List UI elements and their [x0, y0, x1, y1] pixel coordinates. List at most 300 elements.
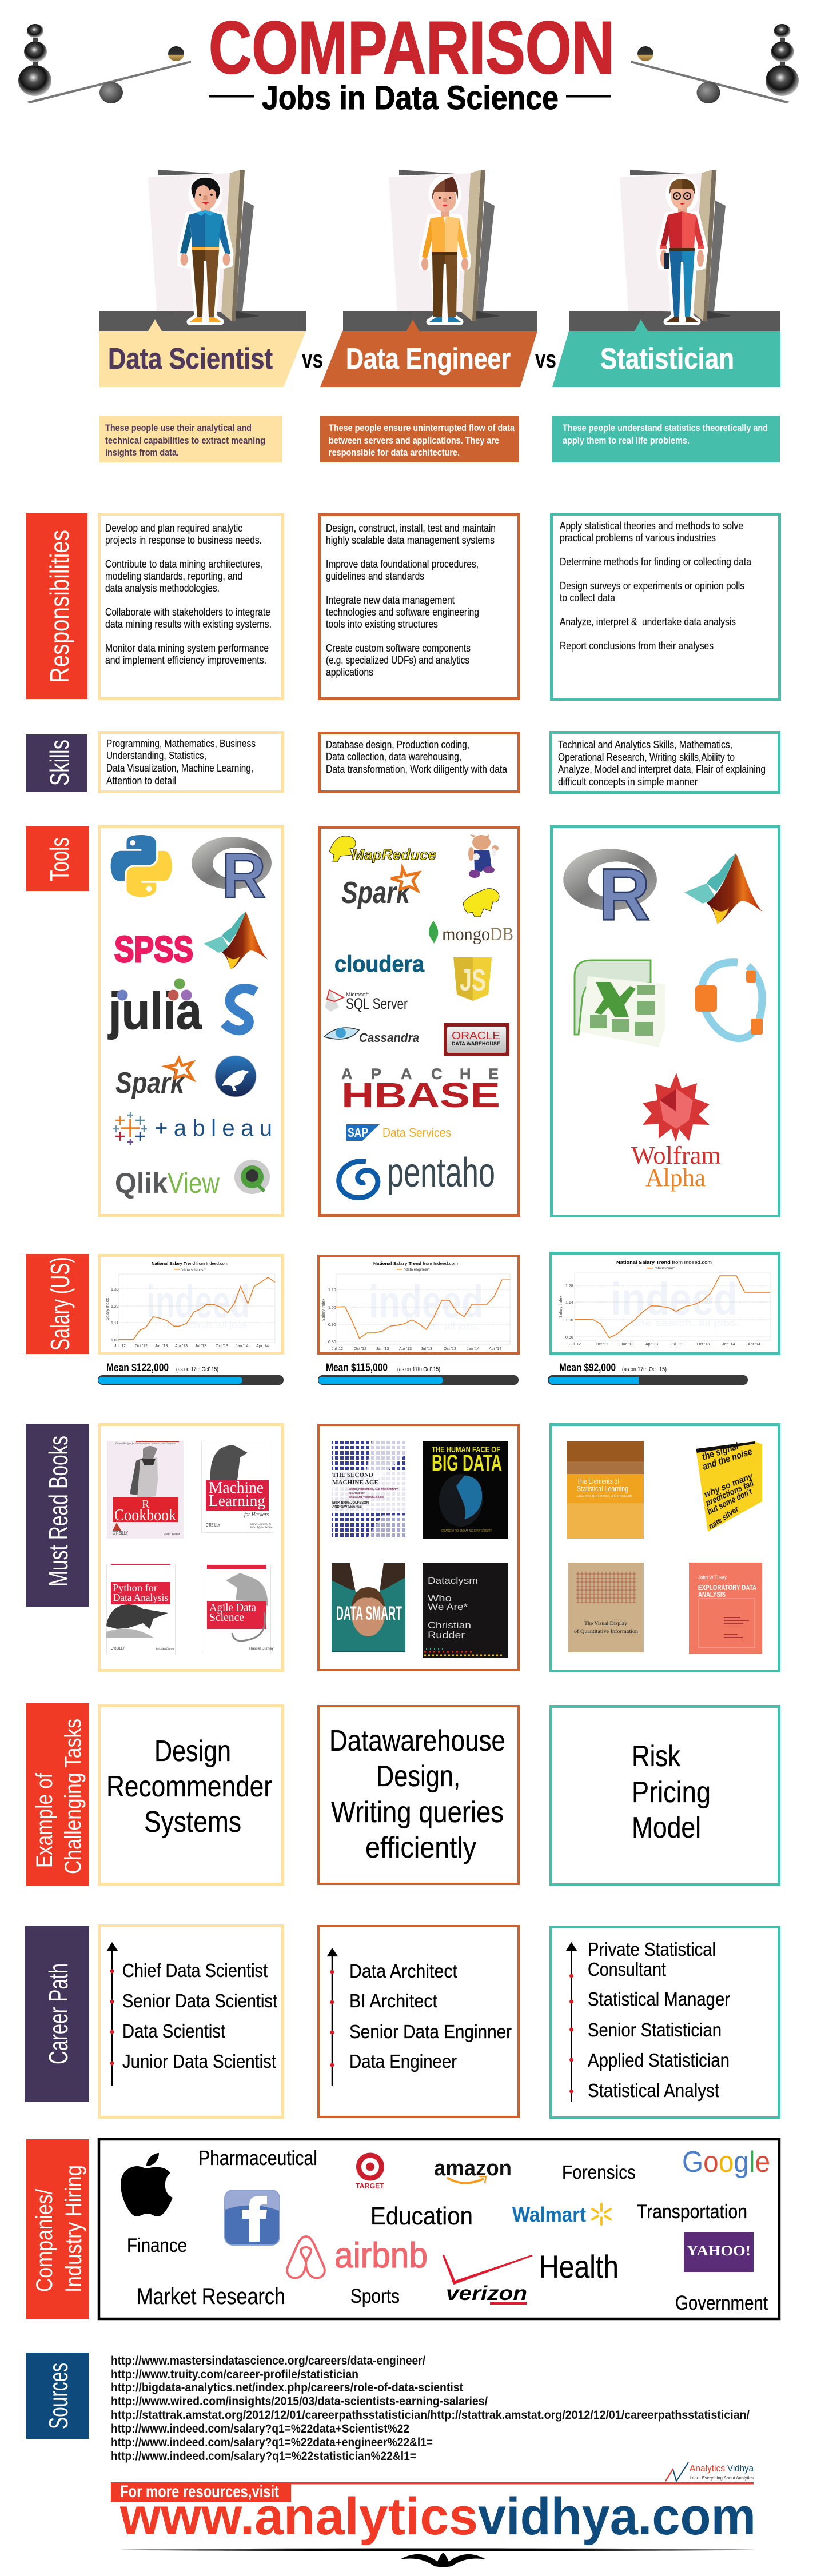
chart: data scientist salary: "data scientist"	[181, 1268, 206, 1272]
chart: data engineer salary: 1.00	[328, 1306, 336, 1310]
text block: data engineer description	[320, 416, 519, 462]
book: Visual Display of Quantitative Information: of Quantitative Information	[574, 1628, 639, 1634]
icon: sap data services: SAP	[348, 1125, 368, 1140]
book: Python for Data Analysis: O'REILLY	[111, 1647, 125, 1651]
icon: target: TARGET	[356, 2182, 384, 2190]
book: R Cookbook: R	[142, 1498, 150, 1511]
icon: verizon: verizon	[446, 2282, 527, 2305]
panel: data scientist skills: Attention to detail	[106, 775, 176, 786]
panel: statistician skills: difficult concepts in simple manner	[558, 776, 698, 788]
icon: qlikview: Qlik	[115, 1167, 168, 1199]
panel: companies and industries	[99, 2139, 779, 2319]
panel: statistician responsibilities: to collect data	[560, 592, 616, 604]
section label: career path	[25, 1926, 89, 2102]
icon: linked S	[224, 989, 256, 1031]
icon: bird badge	[215, 1056, 256, 1097]
figure: data scientist person	[180, 178, 230, 322]
panel: data engineer responsibilities: Integrate new data management	[326, 594, 455, 606]
book: The Human Face of Big Data: CREATED BY RICK SMOLAN AND JENNIFER ERWITT	[441, 1529, 492, 1533]
chart: data scientist salary: Jan '13	[155, 1344, 168, 1348]
panel: data engineer career path: BI Architect	[349, 1990, 437, 2011]
section label: salary: Salary (US)	[45, 1257, 75, 1351]
panel: data scientist responsibilities: projects in response to business needs.	[105, 534, 262, 546]
chart: data engineer salary: Jul '13	[421, 1347, 432, 1351]
book: Agile Data Science	[202, 1565, 274, 1654]
text block: source urls: http://www.indeed.com/salary?q1=%22data+Scientist%22	[111, 2422, 409, 2435]
panel: data engineer responsibilities: Design, construct, install, test and maintain	[326, 522, 496, 534]
panel: data scientist responsibilities: Develop and plan required analytic	[105, 522, 242, 534]
text logo: cloudera: cloudera	[334, 952, 425, 977]
panel: data scientist responsibilities: Collaborate with stakeholders to integrate	[105, 606, 270, 618]
panel: data scientist task	[99, 1706, 282, 1884]
chart: data engineer salary: Jul '12	[332, 1347, 343, 1351]
icon: cassandra: Cassandra	[359, 1031, 419, 1045]
panel: data scientist responsibilities: Monitor data mining system performance	[105, 642, 269, 654]
chart: statistician salary: 1.28	[565, 1284, 573, 1288]
book: Elements of Statistical Learning: Data Mining, Inference, and Prediction	[577, 1495, 632, 1498]
book: R Cookbook: Cookbook	[114, 1506, 176, 1524]
chart: data scientist salary: 1.11	[111, 1321, 118, 1325]
chart: data engineer salary: Jan '13	[376, 1347, 389, 1351]
book: Machine Learning for Hackers: Machine	[209, 1479, 264, 1497]
panel: statistician responsibilities	[551, 514, 780, 700]
chart: data scientist salary: Oct '13	[216, 1344, 228, 1348]
panel: data engineer hero	[320, 170, 537, 387]
book: Dataclysm: We Are*	[428, 1601, 468, 1612]
arrow: career progression	[327, 1948, 338, 2086]
chart: data engineer salary: Jan '14	[467, 1347, 479, 1351]
text block: data scientist description: These people use their analytical and	[105, 422, 252, 433]
panel: data engineer career path	[318, 1926, 519, 2117]
icon: balance right	[631, 24, 799, 103]
chart: data scientist salary: 1.00	[111, 1339, 119, 1343]
text block: statistician description: These people understand statistics theoretically and	[563, 422, 768, 433]
panel: statistician career path: Senior Statistician	[588, 2019, 722, 2040]
figure: statistician person	[659, 179, 705, 322]
panel: data scientist responsibilities	[99, 514, 282, 698]
icon: mongodb: DB	[490, 924, 513, 945]
book: The Second Machine Age	[332, 1441, 405, 1539]
panel: statistician career path	[551, 1927, 779, 2118]
panel: statistician responsibilities: Determine methods for finding or collecting data	[560, 556, 752, 568]
text block: data scientist description	[99, 416, 282, 462]
text: market research: Market Research	[137, 2284, 285, 2309]
chart: data engineer salary: Apr '13	[399, 1347, 412, 1351]
panel: statistician skills	[551, 733, 779, 792]
panel: statistician task: Pricing	[632, 1776, 711, 1809]
salary bar: data engineer: (as on 17th Oct' 15)	[397, 1366, 440, 1373]
book: The Signal and the Noise: nate silver	[707, 1504, 741, 1531]
salary bar: data scientist: Mean $122,000	[106, 1362, 169, 1374]
icon: pentaho: pentaho	[387, 1150, 495, 1196]
panel: data engineer responsibilities: (e.g. specialized UDFs) and analytics	[326, 654, 469, 666]
chart: data scientist salary: Apr '14	[256, 1344, 269, 1348]
icon: tableau: +ableau	[154, 1116, 272, 1141]
logo: analytics vidhya	[665, 2462, 754, 2481]
panel: statistician task: Risk	[632, 1740, 681, 1773]
icon: ring node	[695, 962, 763, 1039]
icon: matlab	[204, 912, 268, 969]
chart: data engineer salary: one search. all jobs.	[386, 1322, 480, 1332]
book: The Signal and the Noise: the signal	[700, 1440, 740, 1463]
book: Machine Learning for Hackers: for Hackers	[244, 1512, 269, 1518]
icon: yahoo	[684, 2232, 754, 2272]
section label: salary	[26, 1254, 89, 1354]
icon: R: R	[599, 853, 650, 936]
text block: source urls: http://www.indeed.com/salary?q1=%22statistician%22&l1=	[111, 2450, 416, 2463]
callout: for more resources: For more resources,visit	[120, 2482, 279, 2501]
panel: data engineer task: Writing queries	[331, 1796, 504, 1829]
panel: data engineer task	[318, 1706, 519, 1884]
book: Python for Data Analysis: Python for	[113, 1582, 157, 1593]
panel: data engineer responsibilities: tools into existing structures	[326, 618, 438, 630]
icon: wolfram alpha: Alpha	[645, 1164, 706, 1192]
icon: wolfram alpha: Wolfram	[631, 1141, 721, 1169]
chart: statistician salary: Jul '12	[569, 1343, 581, 1347]
text block: data scientist description: insights from data.	[105, 447, 179, 458]
figure: data engineer person	[421, 177, 468, 322]
icon: javascript: JS	[460, 963, 486, 997]
icon: oracle data warehouse	[444, 1023, 509, 1056]
panel: statistician responsibilities: Apply statistical theories and methods to solve	[560, 520, 743, 532]
section label: skills: Skills	[45, 740, 74, 786]
icon: hadoop elephant	[463, 889, 499, 917]
icon: pig	[468, 834, 499, 878]
book: The Signal and the Noise: and the noise	[701, 1446, 754, 1472]
label: vs one: vs	[302, 345, 323, 373]
book: Exploratory Data Analysis: EXPLORATORY DATA	[698, 1583, 756, 1592]
book: Agile Data Science: Russell Jurney	[249, 1647, 274, 1651]
logo: analytics vidhya: Vidhya	[727, 2463, 754, 2474]
book: Agile Data Science: Agile Data	[209, 1601, 256, 1614]
salary bar: data engineer: Mean $115,000	[326, 1362, 388, 1374]
callout: for more resources	[111, 2482, 754, 2502]
icon: door scene	[99, 170, 306, 331]
icon: mongodb	[429, 921, 513, 945]
panel: data engineer tools	[319, 828, 519, 1215]
panel: statistician task: Model	[632, 1811, 701, 1844]
panel: statistician task	[551, 1707, 779, 1885]
book: The Human Face of Big Data	[423, 1441, 508, 1539]
panel: data scientist skills: Programming, Mathematics, Business	[106, 738, 256, 749]
book: Dataclysm: Who	[428, 1593, 452, 1604]
book: Python for Data Analysis: Data Analysis	[113, 1592, 168, 1603]
arrow: career progression	[107, 1942, 118, 2086]
book: The Second Machine Age: MACHINE AGE	[332, 1479, 378, 1486]
icon: google: Google	[682, 2146, 770, 2179]
salary bar: statistician: Mean $92,000	[559, 1362, 616, 1374]
panel: data engineer responsibilities: highly scalable data management systems	[326, 534, 495, 546]
text: sports: Sports	[350, 2285, 400, 2307]
book: Visual Display of Quantitative Information: The Visual Display	[584, 1620, 628, 1626]
panel: statistician responsibilities: Analyze, interpret & undertake data analysis	[560, 616, 736, 628]
chart: data engineer salary: 1.10	[328, 1288, 336, 1292]
book: The Signal and the Noise: why so many	[703, 1471, 755, 1500]
website url: vidhya.com	[478, 2487, 756, 2546]
panel: statistician responsibilities: Design surveys or experiments or opinion polls	[560, 580, 744, 592]
chart: data scientist salary: Jan '14	[236, 1344, 248, 1348]
panel: statistician tools	[551, 826, 779, 1216]
book: The Human Face of Big Data: BIG DATA	[432, 1451, 502, 1476]
chart: statistician salary: National Salary Trend from Indeed.com	[616, 1260, 712, 1265]
section label: skills	[26, 734, 87, 792]
chart: data scientist salary: Oct '12	[135, 1344, 148, 1348]
icon: door scene	[343, 170, 537, 331]
text block: data engineer description: responsible for data architecture.	[329, 447, 460, 458]
banner: data engineer	[320, 319, 537, 387]
panel: statistician skills: Technical and Analytics Skills, Mathematics,	[558, 739, 732, 750]
panel: data engineer skills	[319, 733, 519, 792]
section label: companies industry hiring: Industry Hiring	[61, 2165, 86, 2293]
book: Dataclysm: Christian	[428, 1620, 471, 1631]
book: Agile Data Science: Science	[209, 1611, 244, 1624]
label: vs two: vs	[535, 345, 556, 373]
panel: statistician books	[551, 1424, 779, 1671]
panel: data engineer responsibilities	[319, 514, 519, 698]
panel: data scientist task: Systems	[144, 1806, 241, 1839]
icon: julia: julia	[107, 983, 202, 1040]
chart: data engineer salary: National Salary Trend from Indeed.com	[373, 1261, 458, 1266]
text block: data engineer description: These people ensure uninterrupted flow of data	[329, 422, 515, 433]
chart: data engineer salary: "data engineer"	[404, 1268, 430, 1272]
icon: qlikview: View	[168, 1167, 220, 1199]
section label: companies industry hiring: Companies/	[32, 2188, 57, 2292]
chart: data scientist salary: Salary Index	[106, 1298, 110, 1320]
chart: data engineer salary: Apr '14	[489, 1347, 501, 1351]
panel: statistician responsibilities: practical problems of various industries	[560, 532, 716, 544]
book: Exploratory Data Analysis: ANALYSIS	[698, 1590, 726, 1599]
book: Machine Learning for Hackers: Drew Conway &	[249, 1523, 272, 1526]
section label: sources: Sources	[43, 2363, 73, 2429]
panel: data scientist responsibilities: Contribute to data mining architectures,	[105, 558, 262, 570]
panel: data engineer skills: Database design, Production coding,	[326, 739, 469, 750]
text: education: Education	[370, 2202, 473, 2230]
panel: statistician career path: Consultant	[588, 1959, 666, 1980]
section label: example of challenging tasks: Challenging Tasks	[61, 1719, 86, 1874]
book: Machine Learning for Hackers	[201, 1441, 273, 1533]
chart: statistician salary: Jul '13	[671, 1343, 682, 1347]
book: Elements of Statistical Learning	[567, 1441, 644, 1539]
chart: statistician salary: one search. all jobs.	[632, 1319, 739, 1328]
icon: sql server	[325, 990, 408, 1012]
icon: mongodb: mongo	[442, 924, 490, 945]
decorative ornament	[120, 2548, 755, 2567]
text logo: apache hbase	[341, 1065, 500, 1115]
chart: statistician salary: Apr '13	[645, 1343, 658, 1347]
icon: walmart: Walmart	[512, 2203, 586, 2226]
icon: oracle data warehouse: DATA WAREHOUSE	[452, 1041, 500, 1047]
chart: statistician salary: 1.00	[565, 1319, 573, 1323]
text block: source urls: http://www.truity.com/career-profile/statistician	[111, 2368, 358, 2381]
section label: tools	[26, 826, 89, 891]
text block: source urls: http://www.wired.com/insights/2015/03/data-scientists-earning-salaries/	[111, 2395, 488, 2408]
salary bar: data engineer	[318, 1362, 519, 1385]
section label: sources	[26, 2353, 89, 2439]
panel: data scientist career path: Chief Data Scientist	[122, 1960, 268, 1981]
panel: statistician career path: Statistical Manager	[588, 1988, 730, 2010]
text block: source urls: http://www.mastersindatascience.org/careers/data-engineer/	[111, 2354, 425, 2367]
icon: spark: Spark	[341, 876, 411, 910]
section label: must read books	[26, 1424, 89, 1607]
chart: statistician salary: 0.86	[565, 1336, 573, 1340]
panel: data engineer responsibilities: applications	[326, 666, 373, 678]
panel: data engineer responsibilities: technologies and software engineering	[326, 606, 479, 618]
chart: data engineer salary: Oct '12	[354, 1347, 366, 1351]
chart: data engineer salary: Oct '13	[444, 1347, 456, 1351]
subtitle: Jobs in Data Science	[262, 79, 559, 117]
panel: statistician hero	[552, 170, 780, 387]
section label: responsibilities	[26, 513, 87, 699]
icon: verizon	[443, 2255, 532, 2305]
chart: data engineer salary: 0.80	[328, 1340, 336, 1344]
website url	[119, 2487, 756, 2546]
icon: oracle data warehouse: ORACLE	[452, 1030, 500, 1041]
chart: data scientist salary: one search. all jobs.	[164, 1320, 250, 1330]
book: R Cookbook: O'REILLY	[113, 1531, 129, 1536]
panel: statistician career path: Statistical Analyst	[588, 2080, 719, 2101]
chart: data engineer salary: indeed	[369, 1276, 483, 1327]
panel: data scientist responsibilities: data mining results with existing systems.	[105, 618, 272, 630]
panel: data scientist career path: Data Scientist	[122, 2020, 225, 2042]
book: Machine Learning for Hackers: O'REILLY	[206, 1523, 220, 1528]
icon: qlikview	[115, 1160, 270, 1199]
book: The Second Machine Age: BRILLIANT TECHNOLOGIES	[349, 1496, 384, 1499]
text: health: Health	[539, 2248, 619, 2285]
panel: data scientist task: Design	[154, 1735, 231, 1768]
chart: statistician salary: Salary Index	[559, 1296, 563, 1318]
book: Python for Data Analysis	[106, 1564, 175, 1654]
icon: mapreduce: MapReduce	[352, 846, 436, 863]
chart: statistician salary: Oct '12	[596, 1343, 608, 1347]
text block: statistician description	[552, 416, 780, 462]
icon: matlab	[684, 853, 763, 924]
panel: data engineer books	[318, 1425, 519, 1670]
icon: airbnb	[287, 2236, 428, 2278]
banner: data engineer: Data Engineer	[346, 342, 511, 376]
chart: statistician salary: Jan '13	[621, 1343, 633, 1347]
icon: sql server: SQL Server	[346, 995, 408, 1012]
section label: career path: Career Path	[43, 1963, 73, 2064]
chart: data scientist salary: 1.22	[111, 1305, 119, 1309]
panel: data scientist responsibilities: data analysis methodologies.	[105, 582, 220, 594]
panel: data engineer responsibilities: Improve data foundational procedures,	[326, 558, 479, 570]
text logo: apache hbase: APACHE	[341, 1065, 499, 1083]
panel: data engineer responsibilities: Create custom software components	[326, 642, 471, 654]
text block: statistician description: apply them to real life problems.	[563, 435, 690, 446]
panel: statistician career path: Applied Statistician	[588, 2050, 730, 2071]
chart: statistician salary: Apr '14	[748, 1343, 760, 1347]
salary bar: statistician	[548, 1362, 748, 1385]
icon: SPSS: SPSS	[114, 929, 193, 970]
chart: data scientist salary	[99, 1255, 282, 1353]
icon: sap data services	[346, 1124, 451, 1141]
book: The Second Machine Age: ANDREW McAFEE	[332, 1505, 362, 1509]
chart: statistician salary: 1.14	[565, 1301, 573, 1305]
book: Python for Data Analysis: Wes McKinney	[156, 1647, 174, 1651]
panel: statistician career path: Private Statistical	[588, 1939, 716, 1960]
book: The Second Machine Age: WORK, PROGRESS, AND PROSPERITY	[349, 1488, 398, 1491]
panel: data scientist skills: Understanding, Statistics,	[106, 750, 206, 761]
panel: data engineer career path: Data Architect	[349, 1960, 457, 1982]
panel: data scientist skills: Data Visualization, Machine Learning,	[106, 762, 253, 774]
panel: data engineer task: Design,	[376, 1760, 460, 1793]
text block: data scientist description: technical capabilities to extract meaning	[105, 435, 265, 446]
panel: data scientist career path	[99, 1926, 282, 2117]
chart: data engineer salary	[318, 1256, 519, 1353]
panel: data engineer task: Datawarehouse	[329, 1724, 505, 1758]
text logo: apache hbase: HBASE	[341, 1076, 500, 1115]
book: Dataclysm: Rudder	[428, 1630, 465, 1640]
chart: statistician salary: "statistician"	[655, 1267, 675, 1271]
chart: data scientist salary: indeed	[146, 1276, 250, 1327]
icon: R	[192, 837, 272, 911]
icon: sap data services: Data Services	[382, 1125, 451, 1140]
section label: example of challenging tasks	[26, 1703, 89, 1886]
icon: balance left	[18, 24, 191, 103]
text block: source urls: http://stattrak.amstat.org/2012/12/01/careerpathsstatistician/http://stattrak.amstat.org/2012/12/01/careerpathsstatistician/	[111, 2409, 750, 2422]
text block: source urls: http://www.indeed.com/salary?q1=%22data+engineer%22&l1=	[111, 2436, 433, 2449]
icon: target	[356, 2155, 384, 2190]
book: Exploratory Data Analysis: John W Tukey	[698, 1575, 727, 1580]
book: The Signal and the Noise: but some don't	[706, 1487, 754, 1517]
book: The Second Machine Age: THE SECOND	[332, 1472, 373, 1479]
text block: data engineer description: between servers and applications. They are	[329, 435, 499, 446]
banner: data scientist: Data Scientist	[108, 342, 273, 376]
chart: statistician salary: Jan '14	[722, 1343, 735, 1347]
panel: data engineer skills: Data transformation, Work diligently with data	[326, 764, 508, 775]
book: R Cookbook: Paul Teetor	[164, 1533, 181, 1536]
icon: airbnb: airbnb	[334, 2236, 428, 2275]
book: Dataclysm: Dataclysm	[428, 1575, 478, 1586]
title: COMPARISON	[209, 6, 615, 89]
section label: example of challenging tasks: Example of	[32, 1772, 57, 1868]
salary bar: data scientist: (as on 17th Oct' 15)	[176, 1366, 218, 1373]
icon: spark: Spark	[115, 1067, 186, 1100]
book: Data Smart: DATA SMART	[336, 1603, 402, 1624]
chart: statistician salary	[551, 1253, 779, 1353]
logo: analytics vidhya: Analytics	[690, 2463, 725, 2474]
chart: data scientist salary: National Salary Trend from Indeed.com	[152, 1261, 228, 1266]
icon: cassandra	[324, 1028, 419, 1045]
panel: data scientist task: Recommender	[106, 1770, 272, 1803]
section label: must read books: Must Read Books	[43, 1436, 73, 1587]
book: The Human Face of Big Data: THE HUMAN FACE OF	[432, 1445, 500, 1455]
logo: analytics vidhya: Learn Everything About Analytics	[690, 2475, 754, 2481]
icon: door scene	[569, 170, 780, 331]
book: Data Smart	[332, 1563, 405, 1652]
panel: data scientist responsibilities: and implement efficiency improvements.	[105, 654, 266, 666]
icon: wolfram alpha	[631, 1073, 721, 1192]
panel: data engineer responsibilities: guidelines and standards	[326, 570, 424, 582]
book: Elements of Statistical Learning: The Elements of	[577, 1477, 619, 1485]
icon: python	[111, 835, 172, 897]
chart: data scientist salary: Jul '13	[195, 1344, 206, 1348]
panel: data scientist career path: Junior Data Scientist	[122, 2051, 276, 2072]
text: government: Government	[675, 2292, 768, 2314]
book: Exploratory Data Analysis	[689, 1563, 762, 1654]
salary bar: statistician: (as on 17th Oct' 15)	[622, 1366, 667, 1373]
banner: statistician: Statistician	[600, 342, 734, 376]
icon: tableau	[113, 1112, 272, 1145]
icon: apple	[121, 2153, 173, 2216]
book: Visual Display of Quantitative Information	[568, 1563, 644, 1652]
panel: data scientist responsibilities: modeling standards, reporting, and	[105, 570, 242, 582]
panel: data engineer career path: Senior Data Enginner	[349, 2021, 512, 2042]
panel: statistician skills: Operational Research, Writing skills,Ability to	[558, 752, 735, 763]
panel: data scientist tools	[99, 826, 282, 1215]
arrow: career progression	[566, 1942, 577, 2102]
chart: data scientist salary: 1.33	[111, 1288, 119, 1292]
